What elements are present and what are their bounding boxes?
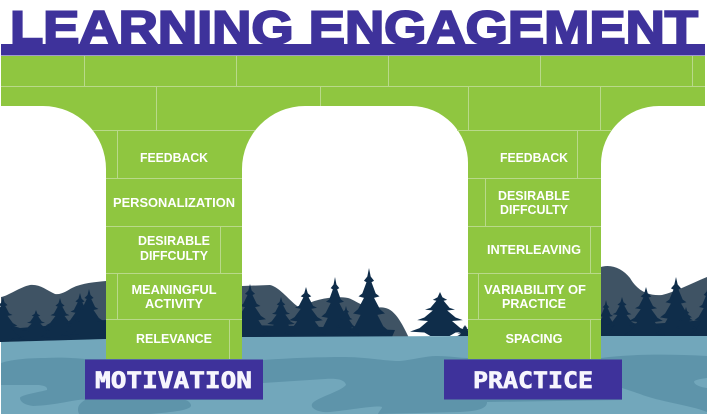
bridge deck and arches	[1, 56, 705, 359]
labels: practice pillar: PRACTICE	[502, 297, 566, 311]
evergreen trees	[0, 268, 707, 342]
pillar mortar lines	[93, 130, 255, 359]
practice label	[444, 360, 622, 400]
labels: motivation pillar: ACTIVITY	[145, 297, 204, 311]
labels: practice pillar: DESIRABLE	[498, 189, 570, 203]
labels: motivation pillar: MEANINGFUL	[132, 283, 217, 297]
labels: practice pillar: VARIABILITY OF	[484, 283, 586, 297]
motivation label: MOTIVATION	[95, 369, 252, 394]
background mountains	[1, 266, 707, 345]
labels: motivation pillar: DIFFCULTY	[140, 249, 209, 263]
labels: motivation pillar: RELEVANCE	[136, 332, 212, 346]
labels: practice pillar: SPACING	[506, 332, 562, 346]
motivation label	[85, 360, 263, 400]
labels: motivation pillar: DESIRABLE	[138, 234, 210, 248]
labels: practice pillar: INTERLEAVING	[487, 243, 581, 257]
labels: practice pillar: DIFFCULTY	[500, 203, 569, 217]
labels: practice pillar: FEEDBACK	[500, 151, 568, 165]
water	[1, 336, 707, 414]
practice label: PRACTICE	[473, 369, 593, 394]
labels: motivation pillar	[113, 151, 235, 346]
deck mortar lines	[1, 56, 705, 130]
bridge structure	[1, 56, 705, 359]
labels: practice pillar	[484, 151, 586, 346]
title: LEARNING ENGAGEMENT	[10, 1, 698, 54]
forest floor	[1, 320, 707, 342]
labels: motivation pillar: FEEDBACK	[140, 151, 208, 165]
labels: motivation pillar: PERSONALIZATION	[113, 196, 235, 210]
title underline bar	[1, 44, 705, 56]
